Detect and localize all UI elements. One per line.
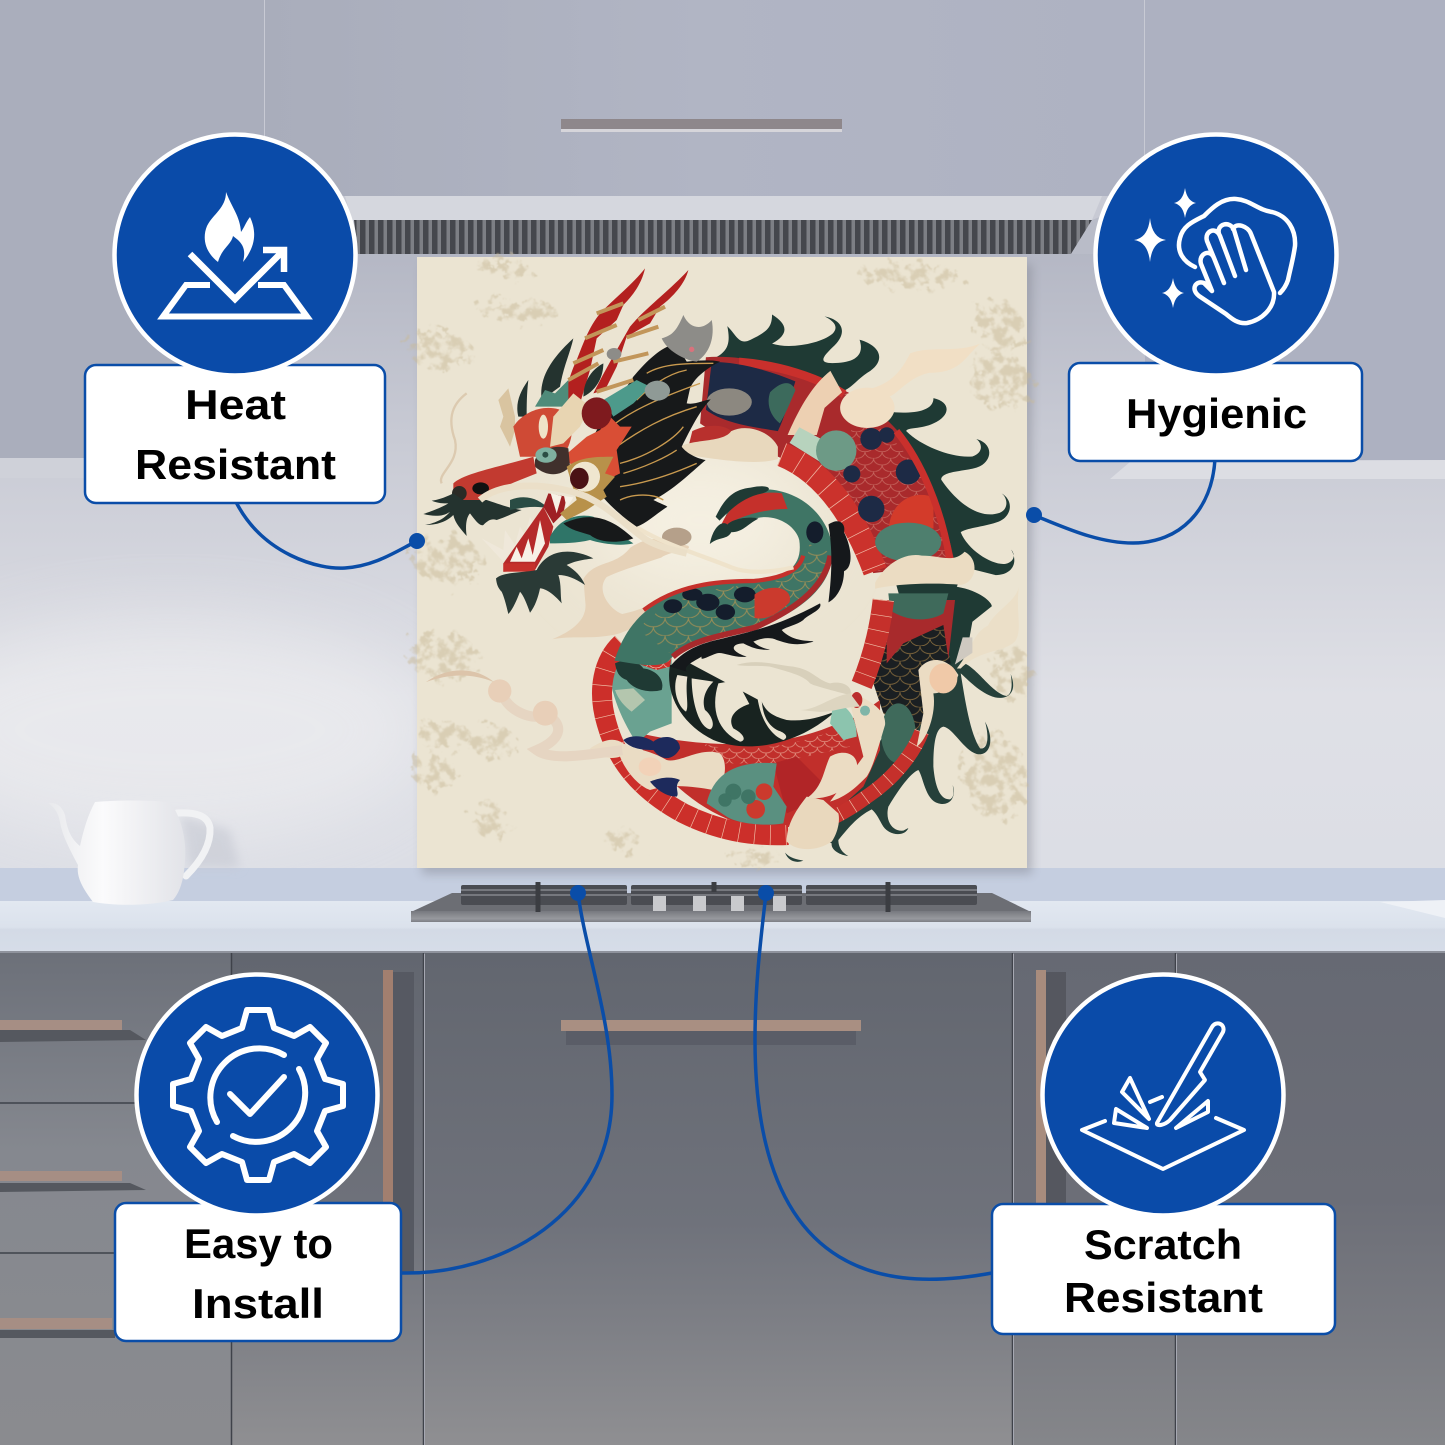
teal jaw [550, 516, 633, 545]
mane gold lines [607, 363, 713, 500]
left horn [563, 268, 645, 403]
feature: heat resistant [85, 134, 385, 503]
spine spikes [828, 521, 851, 602]
gas hob [411, 882, 1031, 922]
black flame mass [669, 663, 835, 746]
upper mouth [543, 493, 567, 523]
label box [115, 1203, 401, 1341]
upper body scale lines [828, 416, 953, 571]
scale ribs [782, 454, 875, 571]
green fold [510, 497, 548, 510]
red peony [627, 637, 672, 670]
connector: hygienic [1026, 459, 1215, 543]
red fan [889, 495, 933, 528]
flame bubble one [675, 675, 687, 712]
green cluster [875, 523, 941, 561]
upper cabinet right [1145, 0, 1445, 460]
connector: heat resistant [235, 500, 425, 568]
wall [0, 250, 1445, 870]
neck cloud [681, 428, 778, 462]
red tuft [582, 397, 612, 429]
heading line two: Resistant [1064, 1274, 1263, 1321]
underside flames [670, 603, 820, 672]
small crest spike [517, 380, 528, 417]
heading line two: Resistant [135, 441, 336, 488]
left crest spike [541, 338, 573, 400]
label box [85, 365, 385, 503]
light patch [590, 450, 810, 590]
badge circle [114, 134, 356, 376]
coil ribs [602, 643, 788, 835]
badge circle [1042, 974, 1284, 1216]
brown cloud bump [662, 528, 692, 546]
dragon glass splashback panel [408, 257, 1031, 868]
upper cabinets centre [265, 0, 1144, 196]
base door left [232, 953, 423, 1445]
counter object right [1380, 900, 1445, 918]
navy scale cluster [706, 362, 795, 431]
small lower flame [785, 853, 803, 862]
peony arcs [627, 637, 672, 670]
peach swirl tail [844, 344, 980, 396]
icon: wiping hand with sparkles [1134, 188, 1295, 323]
mane black [587, 345, 720, 527]
band ribs [862, 600, 883, 685]
middle cloud [875, 552, 975, 589]
cream swirl column [830, 690, 885, 802]
antenna whisker [441, 393, 467, 483]
centre door handle [561, 1020, 861, 1045]
mint band start [790, 427, 828, 462]
bottom left cloud [590, 740, 725, 790]
flame bubble three [715, 680, 749, 742]
colored flames [563, 417, 632, 480]
feature: easy to install [115, 974, 401, 1341]
teal plates [603, 380, 650, 417]
badge circle [1096, 134, 1336, 376]
extractor hood band [345, 196, 1102, 220]
middle dark scales [664, 521, 823, 620]
mint tuft [830, 703, 857, 740]
grey cloud on neck [707, 388, 752, 416]
left drawer handles [0, 1020, 146, 1338]
badge circle [136, 974, 378, 1216]
green scale cluster [881, 703, 916, 763]
middle lower red edge [673, 556, 830, 657]
eye pupil [542, 452, 548, 458]
base door far left [0, 953, 231, 1445]
green left panel [608, 657, 672, 743]
smoke blobs [488, 679, 558, 726]
nostril [452, 486, 467, 501]
peach body cloud [788, 371, 842, 435]
cream swoosh [917, 660, 958, 747]
red scale band [782, 454, 875, 571]
tail head [721, 493, 788, 525]
horn gap spike [583, 363, 603, 397]
middle body [614, 490, 832, 665]
lower right ribs [820, 732, 922, 823]
lower coil back layer [590, 593, 1013, 862]
fan red area [773, 757, 823, 813]
right cabinet underside [1110, 460, 1445, 479]
cream bottom cloud [787, 797, 839, 849]
grey cloud crest [662, 315, 713, 362]
white teapot [48, 800, 240, 905]
cheek pupil [570, 468, 589, 489]
peach lobe [929, 663, 957, 693]
grey curl [645, 381, 670, 401]
green mask [888, 593, 948, 619]
gold fan on upper body [769, 383, 795, 423]
snout [453, 457, 537, 503]
navy under cloud [650, 778, 680, 797]
whisker fan [423, 493, 522, 536]
feature: scratch resistant [992, 974, 1335, 1334]
cloud under head [552, 539, 689, 639]
nostril two [472, 482, 489, 494]
navy bloom [623, 736, 680, 758]
cream swirl [807, 753, 857, 799]
horn stripes [568, 303, 665, 392]
flame bubble two [692, 678, 713, 729]
head group [423, 268, 720, 614]
base door centre [425, 953, 1012, 1445]
middle red scales [755, 588, 790, 619]
dark body gold scales [873, 623, 951, 737]
green fan [816, 430, 856, 471]
eye [535, 447, 557, 463]
green floral [707, 763, 787, 825]
red under neck [688, 426, 735, 447]
middle body scales [638, 544, 828, 653]
lower jaw [503, 507, 553, 572]
beard [496, 552, 593, 614]
dark mane flames upper [708, 314, 1014, 688]
pale tendrils [482, 517, 533, 562]
cream crown spikes [550, 393, 590, 447]
base door far right [1177, 953, 1445, 1445]
jaw hair [563, 517, 633, 542]
upper cabinet left [0, 0, 264, 458]
dark pine foliage [615, 661, 662, 691]
fan leaf [615, 688, 645, 712]
connector: easy to install [402, 885, 612, 1273]
tail fins [710, 486, 769, 544]
heading: Easy to [184, 1220, 333, 1267]
red top band [739, 362, 844, 394]
wall highlight [0, 620, 430, 840]
extractor vent [354, 220, 1092, 254]
feature: hygienic [1069, 134, 1362, 461]
cloud puff upper [840, 388, 895, 428]
red area scales [703, 727, 850, 763]
left smoke [502, 692, 622, 756]
right body red [887, 600, 955, 663]
heading: Scratch [1084, 1221, 1242, 1268]
crown [513, 408, 572, 457]
teal bead [860, 706, 870, 716]
icon: knife scratching surface [1082, 1023, 1244, 1169]
heading: Heat [185, 381, 286, 428]
base door right [1014, 953, 1175, 1445]
interior red area [640, 700, 880, 830]
vertical handle left [383, 970, 414, 1272]
gold cheek [560, 457, 615, 520]
countertop [0, 901, 1445, 953]
icon: flame on surface with arrow [163, 192, 307, 316]
smoke wisp lower [800, 693, 860, 712]
hood lower edge [1071, 200, 1144, 254]
connector: scratch resistant [755, 885, 992, 1279]
left inner red band [862, 600, 883, 685]
dragon artwork [408, 258, 1031, 865]
upper body [700, 357, 955, 573]
smoke wisp [737, 662, 851, 695]
cream ear [498, 388, 515, 447]
green crest [535, 380, 568, 407]
pink jewel [689, 347, 694, 352]
small grey ornament [607, 348, 621, 360]
teeth [510, 493, 573, 562]
grey cloud fold [955, 637, 972, 665]
long whisker [480, 486, 687, 553]
thin outer red band [897, 431, 950, 560]
left cabinet underside [0, 458, 272, 478]
cheek disc [570, 462, 600, 492]
marble veining [408, 258, 1031, 865]
panel shadow [422, 264, 1032, 874]
outer red band lower right [820, 732, 922, 823]
eye surround [535, 447, 570, 474]
counter edge shadow [0, 951, 1445, 954]
long whisker over body [622, 517, 793, 572]
vertical handle right [1036, 970, 1066, 1204]
heading: Hygienic [1126, 390, 1307, 437]
right cream cloud [957, 587, 1019, 668]
door gaps [0, 953, 1176, 1445]
lower mane flames [820, 662, 1013, 856]
right body dark [873, 623, 951, 737]
chin [503, 563, 535, 572]
floral teal circles [718, 784, 756, 807]
icon: gear with check [173, 1010, 343, 1180]
cream marble panel [417, 257, 1027, 868]
floral red circles [746, 783, 772, 819]
cabinet handle [561, 119, 842, 132]
red bead [851, 692, 862, 708]
crescent wisp [426, 670, 494, 682]
cloud peach swirl [639, 757, 661, 776]
lower splash strip [0, 868, 1445, 902]
label box [992, 1204, 1335, 1334]
crown cream patch [539, 415, 548, 439]
right horn [593, 270, 688, 393]
flame bubble four [757, 690, 786, 740]
navy scale blobs [843, 427, 921, 522]
heading line two: Install [192, 1280, 324, 1327]
main coil band [602, 643, 788, 835]
middle upper red edge [644, 556, 803, 610]
label box [1069, 363, 1362, 461]
